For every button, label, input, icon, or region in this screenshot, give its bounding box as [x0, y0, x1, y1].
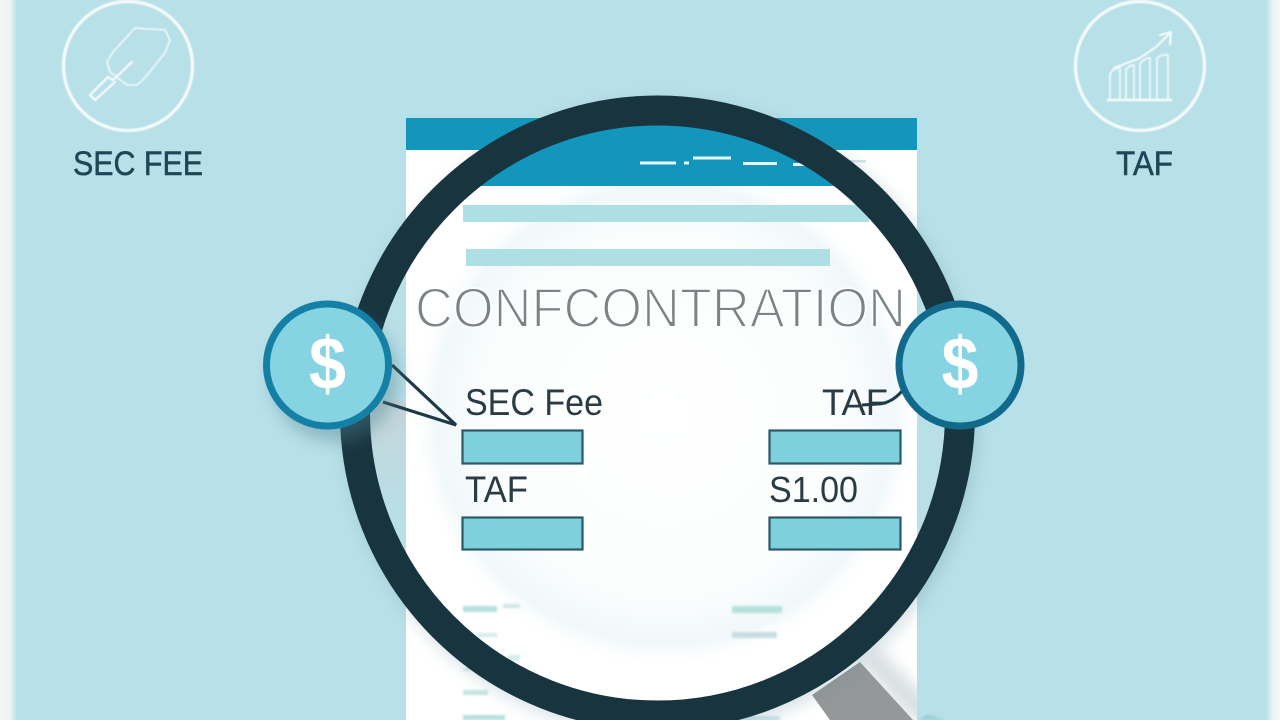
magnified document [406, 186, 917, 700]
document heading: CONFCONTRATION: CONFCONTRATION [415, 276, 906, 339]
field: TAF value [462, 518, 582, 550]
magnified header band [481, 126, 834, 186]
icon: right dollar coin [899, 304, 1021, 426]
icon: left dollar coin [266, 304, 388, 426]
lower ledger text [463, 604, 782, 661]
document panel [406, 118, 917, 720]
right callout pointer [862, 391, 902, 405]
field: right lower value [770, 518, 900, 550]
right page edge [1266, 0, 1280, 720]
icon: right dollar coin: $ [942, 322, 978, 405]
magnifier ring shadow [343, 100, 979, 720]
label: SEC Fee: SEC Fee [465, 382, 603, 423]
field: right upper value [770, 430, 900, 464]
left page edge [0, 0, 17, 720]
small blurred ledger text [463, 668, 780, 720]
magnifier ring [355, 110, 960, 716]
lens background [382, 274, 944, 552]
magnified lens content [370, 126, 944, 700]
magnifier handle [812, 650, 946, 720]
header dashes [640, 156, 809, 166]
icon: SEC fee tool [64, 2, 192, 130]
left coin shadow [271, 314, 399, 442]
lens glare [429, 186, 902, 652]
icon: left dollar coin: $ [309, 322, 346, 405]
label: TAF right: TAF [822, 382, 888, 423]
icon: rising bar chart [1076, 2, 1204, 130]
left callout pointer [383, 365, 456, 425]
lens side shading [371, 400, 406, 446]
label: TAF left: TAF [465, 469, 528, 510]
field: SEC Fee value [462, 430, 582, 464]
summary bar one [463, 205, 869, 222]
heading: TAF: TAF [1116, 145, 1173, 183]
summary bar two [466, 249, 830, 266]
heading: SEC FEE: SEC FEE [73, 145, 203, 183]
label: amount: S1.00 [769, 469, 858, 510]
